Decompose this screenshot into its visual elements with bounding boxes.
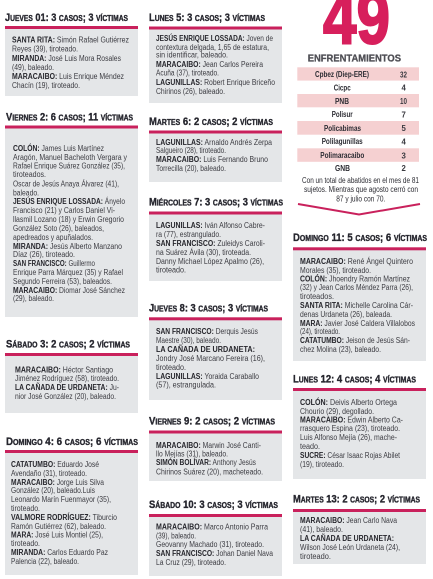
text: Miércoles 7 cases: tiroteado. <box>156 266 186 274</box>
text: Domingo 11 cases: SANTA RITA: Michelle Carolina Cár- <box>300 301 413 310</box>
text: Domingo 4 cases: Palencia (22), baleado. <box>11 557 79 566</box>
text: Jueves 01 cases: Chacín (19), tiroteado. <box>12 81 80 90</box>
text: Domingo 11 cases: denas Urdaneta (26), baleada. <box>300 310 392 319</box>
text: Martes 6 cases: MARACAIBO: Luis Fernando Bruno <box>156 155 269 164</box>
text: Domingo 4 cases: Avendaño (31), tiroteado. <box>11 469 87 478</box>
text: Viernes 2 cases: apedreados y apuñalados. <box>13 233 93 242</box>
text: Jueves 8 cases: tiroteado. <box>156 363 186 372</box>
text: Viernes 2 cases: Francisco (21) y Carlos Daniel Vi- <box>13 206 115 215</box>
heading: Lunes 12: Lunes 12: 4 casos; 4 víctimas <box>293 374 417 386</box>
text: Martes 13 cases: (41), baleado. <box>300 525 343 534</box>
text: Jueves 01 cases: SANTA RITA: Simón Rafael Gutiérrez <box>12 36 129 44</box>
table: enfrentamientos por cuerpo: GNB <box>335 164 350 173</box>
heading: Miércoles 7: Miércoles 7: 3 casos; 3 víctimas <box>149 196 284 208</box>
panel: Domingo 11 <box>293 232 428 361</box>
table: enfrentamientos por cuerpo: 3 <box>402 152 406 160</box>
panel: Martes 6 <box>149 116 282 182</box>
text: Viernes 2 cases: baleado. <box>13 188 39 198</box>
text: Jueves 8 cases: (57), estrangulada. <box>156 380 216 389</box>
text: Lunes 12 cases: rrasquero Espina (23), tiroteado. <box>300 424 400 433</box>
text: Jueves 01 cases: Reyes (39), tiroteado. <box>12 44 78 54</box>
heading: Jueves 01: Jueves 01: 3 casos; 3 víctimas <box>5 12 129 24</box>
table: enfrentamientos por cuerpo <box>297 67 419 173</box>
heading: Sábado 3: Sábado 3: 2 casos; 2 víctimas <box>6 339 131 351</box>
text: Viernes 2 cases: González Soto (26), baleados, <box>13 224 104 233</box>
text: Domingo 11 cases: Morales (35), tiroteado. <box>300 266 371 275</box>
text: Martes 13 cases: MARACAIBO: Jean Carlo Nava <box>300 516 398 525</box>
text: Martes 13 cases: LA CAÑADA DE URDANETA: <box>300 534 394 543</box>
text: Domingo 4 cases: CATATUMBO: Eduardo José <box>11 460 99 469</box>
panel: Jueves 8 <box>149 303 282 400</box>
text: Lunes 12 cases: (19), tiroteado. <box>300 460 344 469</box>
text: Domingo 4 cases <box>11 460 118 566</box>
text: Lunes 12 cases: COLÓN: Deivis Alberto Ortega <box>300 398 398 407</box>
text: Sábado 3 cases <box>15 366 119 401</box>
panel: Jueves 01 <box>5 12 138 96</box>
text: Viernes 2 cases: MIRANDA: Jesús Alberto Manzano <box>13 242 123 251</box>
panel: Miércoles 7 <box>149 196 284 281</box>
text: Martes 6 cases: Torrecilla (20), baleado. <box>156 164 226 173</box>
table: enfrentamientos por cuerpo: 7 <box>402 110 406 120</box>
text: Viernes 9 cases: SIMÓN BOLÍVAR: Anthony Jesús <box>156 458 256 467</box>
heading: Martes 6: Martes 6: 2 casos; 2 víctimas <box>149 116 274 128</box>
text: Lunes 12 cases <box>300 398 403 469</box>
text: Domingo 11 cases: MARA: Javier José Caldera Villalobos <box>300 319 415 328</box>
table: enfrentamientos por cuerpo: Polisur <box>332 110 353 119</box>
text: Domingo 4 cases: Leonardo Marín Fuenmayor (35), <box>11 495 111 504</box>
table: enfrentamientos por cuerpo: PNB <box>335 97 349 106</box>
text: total de abatidos: 87 y julio con 70. <box>336 194 385 204</box>
title: Enfrentamientos: ENFRENTAMIENTOS <box>308 53 401 65</box>
heading: Viernes 2: Viernes 2: 6 casos; 11 víctimas <box>6 112 134 124</box>
text: Miércoles 7 cases: na Suárez Ávila (30), tiroteada. <box>156 248 251 257</box>
text: Domingo 4 cases: MIRANDA: Carlos Eduardo Paz <box>11 548 108 557</box>
table: enfrentamientos por cuerpo: 10 <box>400 97 408 106</box>
text: Jueves 01 cases: (49), baleado. <box>12 63 54 72</box>
text: Martes 6 cases: LAGUNILLAS: Arnaldo Andrés Zerpa <box>156 138 273 147</box>
text: Sábado 10 cases: (39), baleado. <box>156 532 196 540</box>
text: Domingo 11 cases: MARACAIBO: René Ángel Quintero <box>300 257 414 266</box>
text: Domingo 4 cases: tiroteado. <box>11 504 40 513</box>
text: Domingo 11 cases: (32) y Jean Carlos Méndez Parra (26), <box>300 283 413 292</box>
panel: Sábado 10 <box>149 499 282 576</box>
text: Viernes 2 cases: tiroteados. <box>13 170 46 179</box>
table: enfrentamientos por cuerpo: 2 <box>402 164 406 173</box>
text: Viernes 2 cases: Díaz (26), tiroteado. <box>13 250 75 259</box>
text: Martes 13 cases: Wilson José León Urdaneta (24), <box>300 543 400 552</box>
text: Sábado 10 cases: SAN FRANCISCO: Johan Daniel Nava <box>156 549 274 558</box>
text: Viernes 2 cases: MARACAIBO: Diomar José Sánchez <box>13 286 125 295</box>
arrow: chevron pointing down <box>298 204 420 214</box>
text: Jueves 8 cases: LA CAÑADA DE URDANETA: <box>156 345 255 354</box>
text: Jueves 8 cases: Maestre (30), baleado. <box>156 336 221 345</box>
text: Sábado 3 cases: Jiménez Rodríguez (58), tiroteado. <box>15 374 119 383</box>
text: Sábado 3 cases: nior José González (20), baleado. <box>15 392 116 401</box>
text: Domingo 4 cases: Ramón Gutiérrez (62), baleado. <box>11 522 106 531</box>
text: Domingo 4 cases: tiroteado. <box>11 539 40 548</box>
text: Lunes 12 cases: Chourio (29), degollado. <box>300 407 374 416</box>
heading: Domingo 4: Domingo 4: 6 casos; 6 víctimas <box>6 436 139 448</box>
text: Viernes 9 cases: MARACAIBO: Marwin José Canti- <box>156 441 261 450</box>
text: Viernes 2 cases <box>13 144 127 303</box>
text: Sábado 3 cases: MARACAIBO: Héctor Santiago <box>15 366 114 374</box>
table: enfrentamientos por cuerpo: 32 <box>400 70 408 79</box>
heading: Sábado 10: Sábado 10: 3 casos; 3 víctimas <box>149 499 279 511</box>
text: Domingo 4 cases: MARA: José Luis Montiel (25), <box>11 530 103 540</box>
text: Viernes 2 cases: Segundo Ferreira (53), baleados. <box>13 277 112 286</box>
text: Sábado 10 cases: La Cruz (29), tiroteado. <box>156 558 226 567</box>
panel: Viernes 2 <box>5 112 138 317</box>
text: Viernes 2 cases: JESÚS ENRIQUE LOSSADA: Ányelo <box>13 197 126 206</box>
text: Domingo 11 cases: chez Molina (23), baleado. <box>300 345 381 354</box>
text: Lunes 12 cases: Luis Alfonso Mejía (26), mache- <box>300 433 397 442</box>
table: enfrentamientos por cuerpo: Cicpc <box>334 84 351 92</box>
text: Jueves 8 cases <box>156 327 265 389</box>
text: Viernes 9 cases <box>156 441 263 476</box>
panel: Lunes 12 <box>293 374 426 479</box>
text: Viernes 9 cases: llo Mejías (31), baleado. <box>156 450 228 458</box>
heading: Lunes 5: Lunes 5: 3 casos; 3 víctimas <box>149 12 266 24</box>
table: enfrentamientos por cuerpo: Polimaracaibo <box>320 151 364 160</box>
text: Sábado 10 cases: Geovanny Machado (31), tiroteado. <box>156 540 264 549</box>
table: enfrentamientos por cuerpo: 4 <box>402 84 406 93</box>
panel: Sábado 3 <box>5 339 138 413</box>
text: Lunes 5 cases: JESÚS ENRIQUE LOSSADA: Joven de <box>156 34 273 43</box>
text: Lunes 5 cases: Acuña (37), tiroteado. <box>156 68 219 78</box>
text: Jueves 01 cases <box>12 36 129 90</box>
text: Lunes 12 cases: MARACAIBO: Edwin Alberto Ca- <box>300 416 403 424</box>
text: Martes 13 cases <box>300 516 400 561</box>
text: Viernes 2 cases: SAN FRANCISCO: Guillermo <box>13 259 96 268</box>
text: Martes 6 cases <box>156 138 273 173</box>
table: enfrentamientos por cuerpo: 4 <box>402 138 406 146</box>
text: Lunes 12 cases: teado. <box>300 442 320 451</box>
text: Viernes 9 cases: Chirinos Suárez (20), macheteado. <box>156 468 263 476</box>
text: Viernes 2 cases: Aragón, Manuel Bacheloth Vergara y <box>13 153 127 162</box>
text: Viernes 2 cases: Enrique Parra Márquez (35) y Rafael <box>13 268 123 277</box>
text: total de abatidos <box>302 176 419 204</box>
panel: Domingo 4 <box>5 436 139 575</box>
text: Domingo 4 cases: VALMORE RODRÍGUEZ: Tiburcio <box>11 513 118 522</box>
text: Viernes 2 cases: COLÓN: James Luis Martínez <box>13 144 104 153</box>
text: Domingo 4 cases: MARACAIBO: Jorge Luis Silva <box>11 478 105 487</box>
panel: Martes 13 <box>293 493 426 564</box>
heading: Viernes 9: Viernes 9: 2 casos; 2 víctimas <box>149 415 276 427</box>
text: Domingo 4 cases: González (20), baleado.Luis <box>11 486 95 495</box>
text: Viernes 2 cases: (29), baleado. <box>13 294 54 303</box>
text: Domingo 11 cases: CATATUMBO: Jeison de Jesús Sán- <box>300 336 410 345</box>
table: enfrentamientos por cuerpo: Polilagunillas <box>322 137 363 146</box>
text: Jueves 01 cases: MIRANDA: José Luis Mora Rosales <box>12 54 121 63</box>
text: Lunes 5 cases: MARACAIBO: Jean Carlos Pereira <box>156 60 264 69</box>
text: Viernes 2 cases: Oscar de Jesús Anaya Álvarez (41), <box>13 180 119 188</box>
text: Lunes 5 cases: Chirinos (26), baleado. <box>156 87 225 96</box>
table: enfrentamientos por cuerpo: Policabimas <box>324 124 362 133</box>
text: Miércoles 7 cases: Danny Michael López Apalmo (26), <box>156 257 264 266</box>
text: Miércoles 7 cases <box>156 221 265 274</box>
text: Jueves 8 cases: LAGUNILLAS: Yoraida Caraballo <box>156 372 260 381</box>
table: enfrentamientos por cuerpo: 5 <box>402 124 406 133</box>
text: Viernes 2 cases: llasmil Lozano (18) y Erwin Gregorio <box>13 215 125 224</box>
table: enfrentamientos por cuerpo: Cpbez (Diep-ERE) <box>315 70 369 79</box>
text: Sábado 3 cases: LA CAÑADA DE URDANETA: Ju- <box>15 383 119 392</box>
text: Miércoles 7 cases: SAN FRANCISCO: Zuleidys Caroli- <box>156 239 265 248</box>
text: Lunes 5 cases: contextura delgada, 1,65 de estatura, <box>156 43 269 52</box>
text: Lunes 5 cases: sin identificar, baleado. <box>156 50 228 60</box>
text: Domingo 11 cases: tiroteados. <box>300 292 334 301</box>
text: Domingo 11 cases <box>300 257 415 354</box>
text: Jueves 01 cases: MARACAIBO: Luis Enrique Méndez <box>12 72 124 81</box>
text: Martes 13 cases: tiroteado. <box>300 552 331 561</box>
text: Lunes 12 cases: SUCRE: César Isaac Rojas Abilet <box>300 451 401 460</box>
text: Miércoles 7 cases: LAGUNILLAS: Iván Alfonso Cabre- <box>156 221 265 230</box>
panel: Viernes 9 <box>149 415 282 481</box>
text: Lunes 5 cases <box>156 34 276 96</box>
text: Jueves 8 cases: SAN FRANCISCO: Derquis Jesús <box>156 327 258 336</box>
text: Domingo 11 cases: (24), tiroteado. <box>300 327 340 336</box>
text: Martes 6 cases: Salgueiro (28), tiroteado. <box>156 146 226 155</box>
text: Lunes 5 cases: LAGUNILLAS: Robert Enrique Briceño <box>156 78 276 87</box>
text: Miércoles 7 cases: ra (77), estrangulado. <box>156 230 221 239</box>
panel: Lunes 5 <box>149 12 282 103</box>
text: Domingo 11 cases: COLÓN: Jhoendry Ramón Martínez <box>300 274 410 284</box>
heading: Jueves 8: Jueves 8: 3 casos; 3 víctimas <box>149 303 269 315</box>
text: Sábado 10 cases <box>156 522 274 567</box>
text: Sábado 10 cases: MARACAIBO: Marco Antonio Parra <box>156 522 269 532</box>
text: Viernes 2 cases: Rafael Enrique Suárez González (35), <box>13 162 125 170</box>
text: Jueves 8 cases: Jondry José Marcano Fereira (16), <box>156 354 265 363</box>
